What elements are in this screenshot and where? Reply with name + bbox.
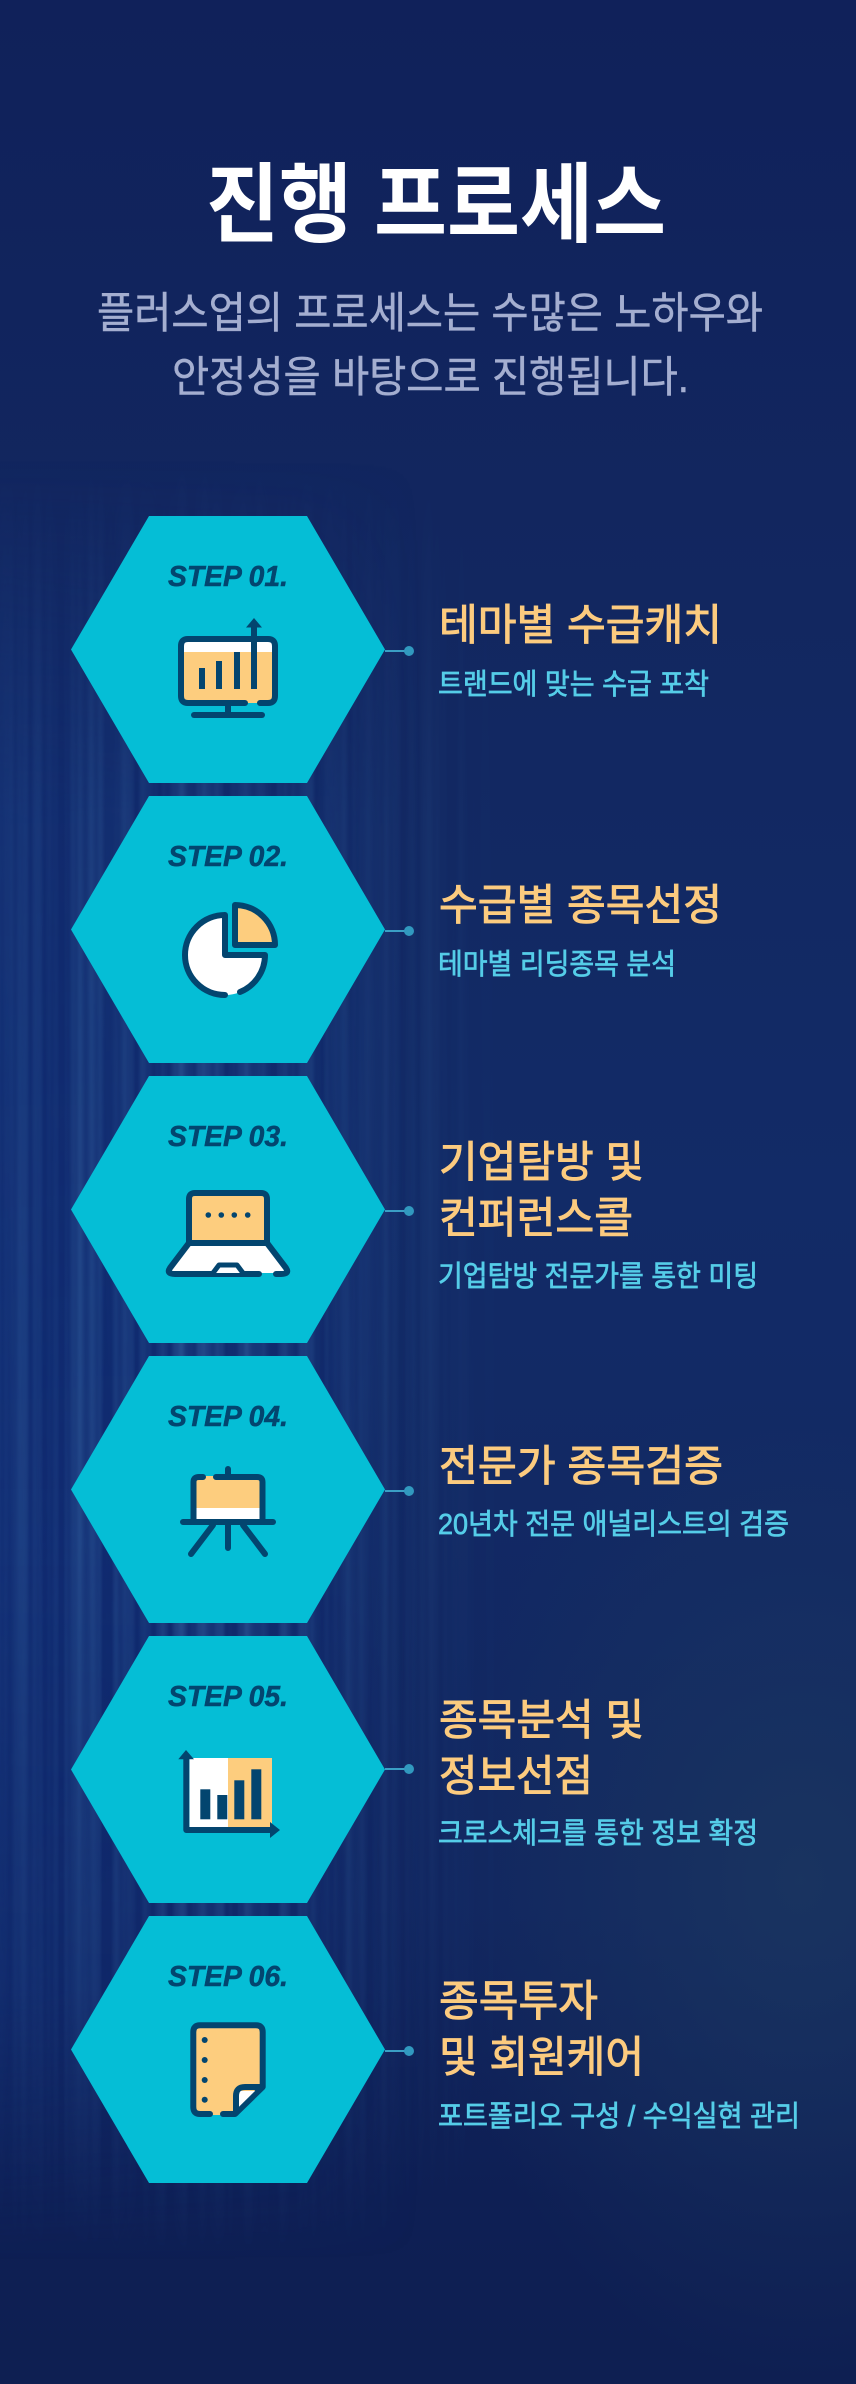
hexagon 03 — [71, 1076, 385, 1343]
subtitle — [97, 290, 763, 402]
step label 01: STEP 01. — [168, 561, 288, 593]
connector 05 — [385, 1764, 414, 1774]
connector 01 — [385, 646, 414, 656]
step label 06: STEP 06. — [168, 1961, 288, 1993]
heading 03: 기업탐방 및 — [439, 1139, 644, 1187]
heading 03 — [439, 1139, 644, 1243]
heading 06: 및 회원케어 — [439, 2034, 644, 2082]
step 02 — [71, 796, 722, 1063]
step label 05: STEP 05. — [168, 1681, 288, 1713]
connector 04 — [385, 1486, 414, 1496]
heading 02: 수급별 종목선정 — [439, 882, 722, 930]
title: 진행 프로세스 — [206, 157, 666, 254]
description 06: 포트폴리오 구성 / 수익실현 관리 — [438, 2101, 800, 2133]
step 06 — [71, 1916, 800, 2183]
hexagon 06 — [71, 1916, 385, 2183]
icon: presentation board — [183, 1469, 273, 1554]
step label 02: STEP 02. — [168, 841, 288, 873]
heading 01: 테마별 수급캐치 — [439, 602, 722, 650]
hexagon 05 — [71, 1636, 385, 1903]
heading 06: 종목투자 — [439, 1978, 598, 2026]
step 03 — [71, 1076, 758, 1343]
description 03: 기업탐방 전문가를 통한 미팅 — [438, 1260, 758, 1293]
connector 03 — [385, 1206, 414, 1216]
heading 03: 컨퍼런스콜 — [439, 1195, 633, 1243]
icon: document — [193, 2025, 263, 2115]
description 04: 20년차 전문 애널리스트의 검증 — [438, 1509, 789, 1541]
description 05: 크로스체크를 통한 정보 확정 — [438, 1817, 758, 1850]
subtitle: 안정성을 바탕으로 진행됩니다. — [172, 354, 689, 402]
heading 05: 종목분석 및 — [439, 1697, 644, 1745]
hexagon 01 — [71, 516, 385, 783]
icon: monitor chart — [181, 618, 275, 715]
heading 06 — [439, 1978, 644, 2082]
step 05 — [71, 1636, 758, 1903]
heading 05 — [439, 1697, 644, 1801]
connector 02 — [385, 926, 414, 936]
step label 04: STEP 04. — [168, 1401, 288, 1433]
heading 05: 정보선점 — [439, 1753, 593, 1801]
step label 03: STEP 03. — [168, 1121, 288, 1153]
description 01: 트랜드에 맞는 수급 포착 — [438, 668, 709, 701]
background — [0, 499, 856, 2150]
connector 06 — [385, 2046, 414, 2056]
description 02: 테마별 리딩종목 분석 — [438, 949, 676, 981]
heading 04: 전문가 종목검증 — [439, 1443, 723, 1491]
hexagon 02 — [71, 796, 385, 1063]
icon: pie chart — [185, 905, 275, 995]
hexagon 04 — [71, 1356, 385, 1623]
subtitle: 플러스업의 프로세스는 수많은 노하우와 — [97, 290, 763, 338]
step 04 — [71, 1356, 789, 1623]
step 01 — [71, 516, 722, 783]
icon: bar chart — [178, 1750, 280, 1838]
icon: laptop — [168, 1193, 288, 1274]
